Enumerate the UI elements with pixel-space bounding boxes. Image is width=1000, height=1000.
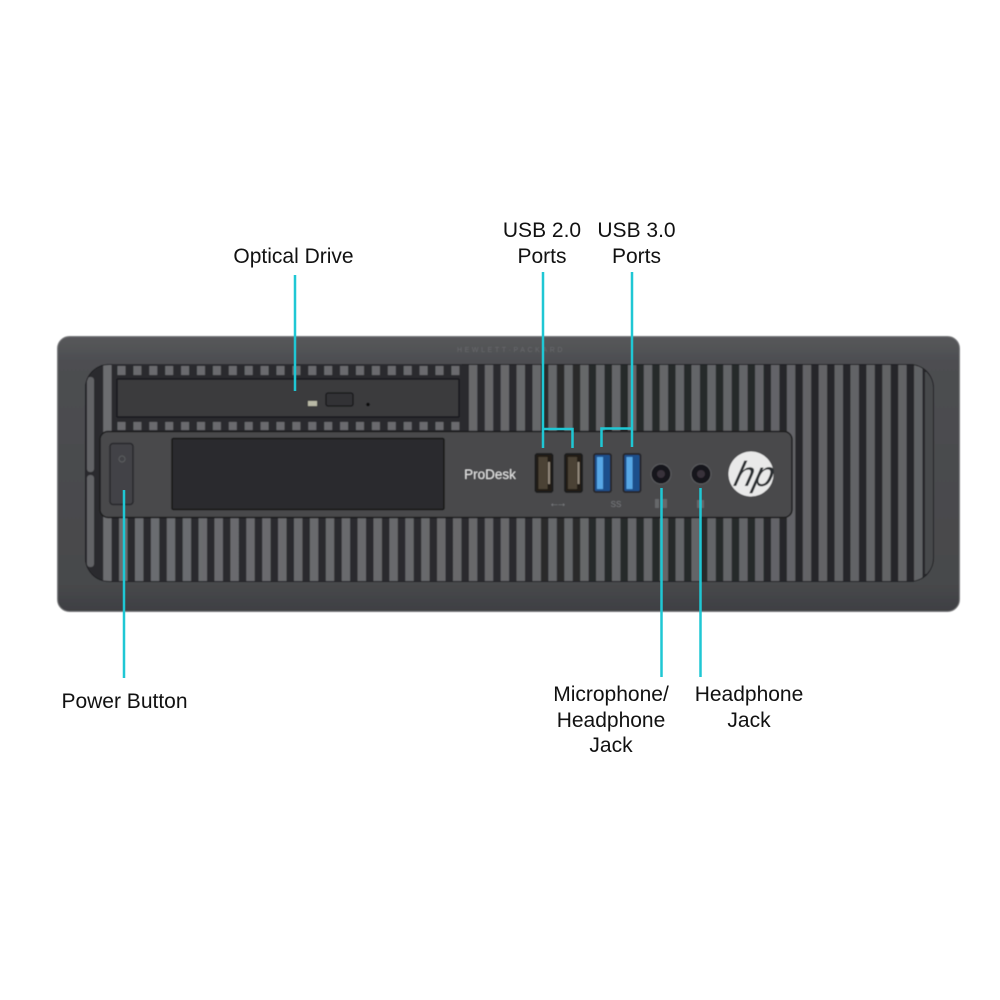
ventilation grille [85,364,934,582]
optical bay surround [112,364,462,432]
label: Power Button: Power Button [61,690,188,713]
callout line: optical drive [294,275,296,391]
USB 3.0 symbol: SS [611,500,621,509]
dark blank panel [172,438,444,510]
label: USB 2.0 Ports: USB 2.0 [503,219,581,242]
HP logo: hp [731,454,779,494]
label: Microphone/Headphone Jack: Headphone [557,709,665,732]
USB 3.0 ports [594,454,640,509]
drive LED [308,401,317,406]
callout line: headphone jack [699,488,702,677]
headphone jack [691,464,711,508]
label: USB 3.0 Ports: Ports [612,245,661,268]
callout line: USB 2.0 ports [543,272,572,448]
USB 2.0 symbol: ⭠⭢ [551,499,565,509]
label: Microphone/Headphone Jack: Microphone/ [553,683,669,706]
label: Headphone Jack: Jack [727,709,771,732]
label: Optical Drive: Optical Drive [233,245,354,268]
callout line: power button [123,490,125,678]
label: USB 2.0 Ports: Ports [517,245,567,268]
callout line: microphone jack [660,488,663,677]
ProDesk label: ProDesk [464,467,516,482]
optical drive [117,379,459,417]
drive eject button [326,393,353,406]
computer front chassis [58,336,960,612]
USB 2.0 ports [536,454,582,509]
front control panel [100,432,792,518]
power button [110,444,133,504]
label: Microphone/Headphone Jack: Jack [589,734,633,757]
label: USB 3.0 Ports: USB 3.0 [597,219,676,242]
label: Headphone Jack: Headphone [695,683,803,706]
chassis body [58,336,960,612]
microphone jack [651,464,671,508]
drive pinhole [366,403,370,406]
brand text: Hewlett-Packard: HEWLETT·PACKARD [457,347,565,354]
callout line: USB 3.0 ports [602,272,632,447]
